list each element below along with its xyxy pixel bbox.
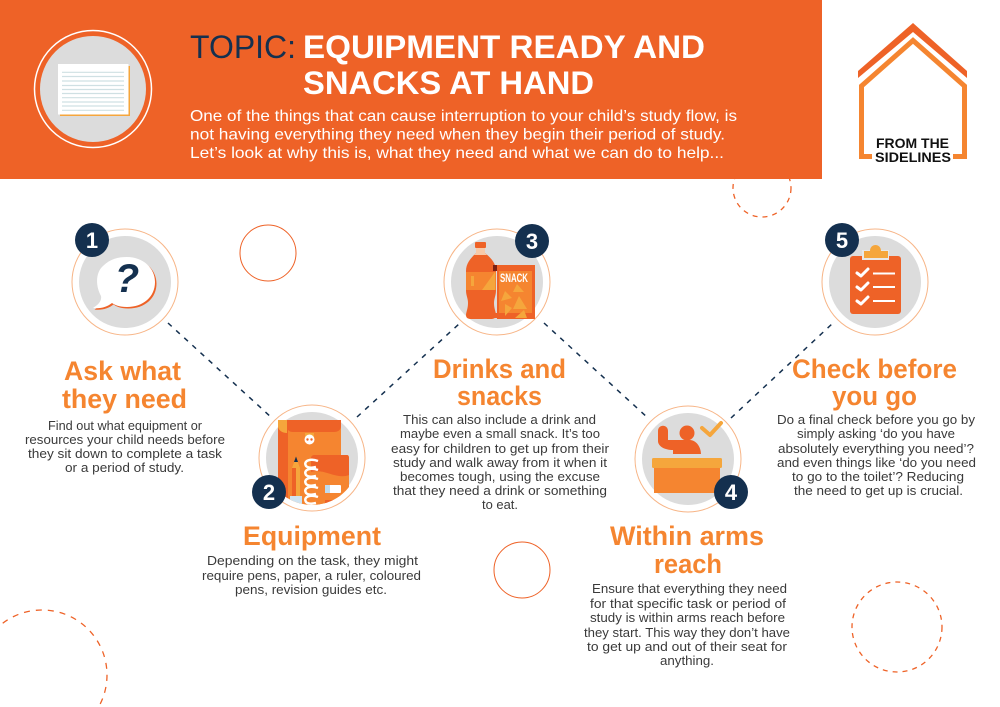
icon: folder, pencil, notebook <box>259 405 365 515</box>
badge: number 3 <box>515 224 549 258</box>
body text: for that specific task or period of <box>590 597 787 611</box>
heading: they need <box>62 384 187 414</box>
decorative circle: lower middle <box>494 542 550 598</box>
badge: number 1 <box>75 223 109 257</box>
intro paragraph: One of the things that can cause interruption to your child’s study flow, is <box>190 108 737 125</box>
intro paragraph <box>190 108 737 162</box>
icon: lined index card <box>34 30 152 148</box>
body text: Depending on the task, they might <box>207 554 419 568</box>
body text: easy for children to get up from their <box>391 442 609 456</box>
panel: step 3 drinks and snacks <box>391 224 609 512</box>
arrow: dashed connector 3 to 4 <box>544 323 648 418</box>
panel: step 5 check before you go <box>777 223 976 498</box>
title <box>190 29 705 101</box>
title: TOPIC: <box>190 29 296 65</box>
arrow: dashed connector 1 to 2 <box>168 323 272 418</box>
heading: Equipment <box>243 521 381 551</box>
heading: you go <box>832 381 917 411</box>
badge: number 2 <box>252 475 286 509</box>
body text: simply asking ‘do you have <box>797 427 955 441</box>
body text: and even things like ‘do you need <box>777 456 976 470</box>
body text: anything. <box>660 654 714 668</box>
intro paragraph: Let’s look at why this is, what they need and what we can do to help... <box>190 145 724 162</box>
body text <box>777 413 976 498</box>
badge: number 4 <box>714 475 748 509</box>
body text: to get up and out of their seat for <box>587 640 787 654</box>
heading <box>792 354 957 411</box>
header panel <box>0 0 822 179</box>
heading: Ask what <box>64 356 181 386</box>
icon: speech bubble with question mark <box>72 229 178 335</box>
panel: step 4 within arms reach <box>584 406 790 668</box>
icon: bottle and snack bag: SNACK <box>500 271 528 285</box>
title: EQUIPMENT READY AND <box>303 29 705 65</box>
body text: require pens, paper, a ruler, coloured <box>202 569 421 583</box>
body text: becomes tough, using the excuse <box>400 470 600 484</box>
body text: the need to get up is crucial. <box>794 484 963 498</box>
badge: number 5 <box>825 223 859 257</box>
heading: reach <box>654 549 722 579</box>
body text: to eat. <box>482 498 518 512</box>
logo: From the Sidelines <box>858 23 967 165</box>
body text <box>202 554 421 597</box>
body text: they sit down to complete a task <box>28 447 223 461</box>
body text: that they need a drink or something <box>393 484 607 498</box>
body text: they start. This way they don’t have <box>584 626 790 640</box>
badge: number 1: 1 <box>86 228 98 253</box>
badge: number 5: 5 <box>836 228 848 253</box>
badge: number 4: 4 <box>725 480 738 505</box>
body text: Ensure that everything they need <box>592 582 787 596</box>
body text: Find out what equipment or <box>48 419 202 433</box>
title: SNACKS AT HAND <box>303 65 594 101</box>
body text: absolutely everything you need’? <box>778 442 974 456</box>
header background <box>0 0 822 179</box>
body text <box>391 413 609 512</box>
heading: snacks <box>457 381 542 411</box>
icon: speech bubble with question mark: ? <box>115 257 139 301</box>
logo: From the Sidelines: FROM THE <box>876 135 949 151</box>
arrow: dashed connector 2 to 3 <box>357 324 459 417</box>
heading <box>610 521 764 579</box>
icon: clipboard checklist <box>822 229 928 335</box>
body text <box>584 582 790 668</box>
heading: Drinks and <box>433 354 566 384</box>
badge: number 2: 2 <box>263 480 275 505</box>
body text: study is within arms reach before <box>590 611 785 625</box>
heading: Within arms <box>610 521 764 551</box>
icon: person at desk with tick <box>635 406 741 512</box>
decorative dashed circle: bottom right <box>852 582 942 672</box>
intro paragraph: not having everything they need when they begin their period of study. <box>190 126 725 144</box>
panel: step 2 equipment <box>202 405 421 597</box>
logo: From the Sidelines: SIDELINES <box>875 149 951 165</box>
heading <box>433 354 566 411</box>
body text: resources your child needs before <box>25 433 225 447</box>
decorative dashed circle: under header <box>733 159 791 217</box>
body text: pens, revision guides etc. <box>235 583 387 597</box>
body text: This can also include a drink and <box>403 413 596 427</box>
icon: bottle and snack bag <box>444 229 550 335</box>
body text: or a period of study. <box>65 461 184 475</box>
heading <box>62 356 187 414</box>
decorative circle: upper middle <box>240 225 296 281</box>
body text: maybe even a small snack. It’s too <box>400 427 600 441</box>
heading: Check before <box>792 354 957 384</box>
panel: step 1 ask what they need <box>25 223 225 475</box>
body text: to go to the toilet’? Reducing <box>792 470 964 484</box>
arrow: dashed connector 4 to 5 <box>731 323 833 418</box>
body text: study and walk away from it when it <box>393 456 608 470</box>
decorative dashed circle: bottom left <box>0 610 107 707</box>
body text <box>25 419 225 475</box>
badge: number 3: 3 <box>526 229 538 254</box>
body text: Do a final check before you go by <box>777 413 976 427</box>
